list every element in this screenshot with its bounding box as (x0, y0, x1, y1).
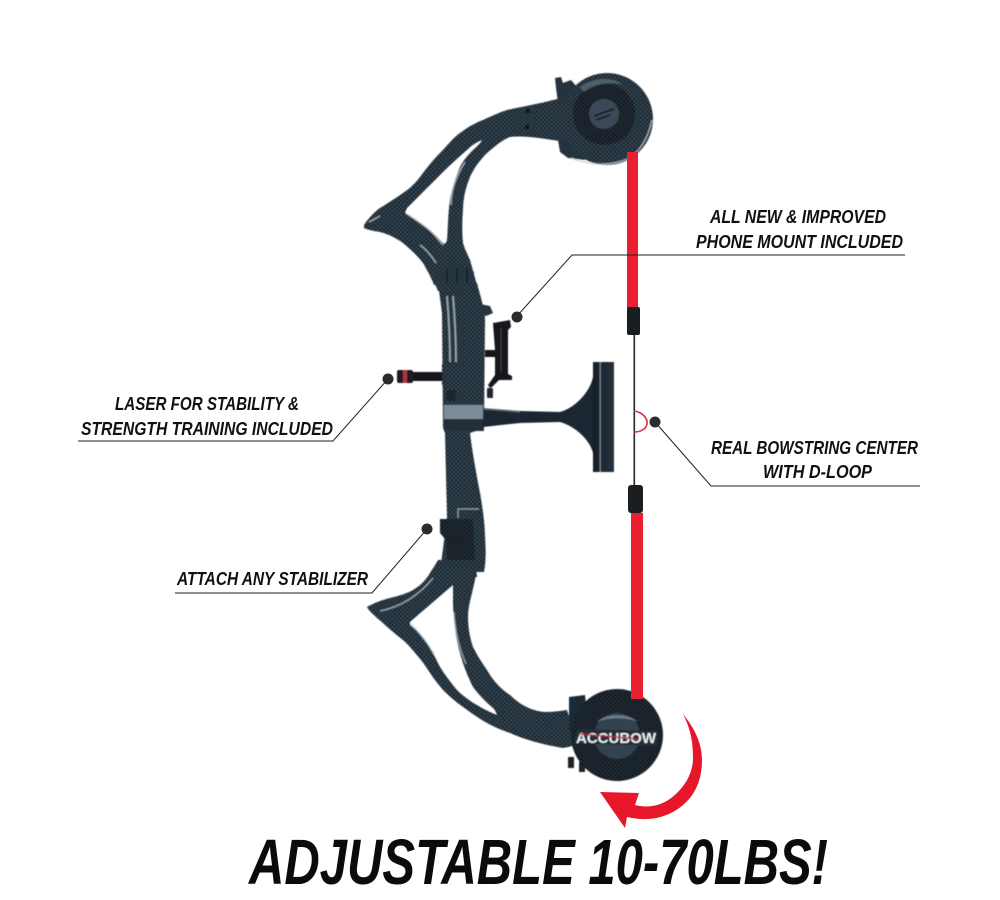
callout: laser (78, 374, 394, 441)
callout: d-loop: WITH D-LOOP (763, 461, 873, 482)
cam logo: ACCUBOW (576, 730, 657, 747)
laser (397, 362, 463, 388)
lower limb (367, 560, 578, 748)
callout: d-loop (650, 416, 920, 486)
callout: phone mount: PHONE MOUNT INCLUDED (696, 231, 903, 252)
callout: stabilizer: ATTACH ANY STABILIZER (176, 568, 369, 589)
stabilizer mount block (440, 519, 477, 577)
bow (364, 73, 663, 781)
riser (438, 283, 493, 577)
phone mount (485, 320, 512, 398)
headline: ADJUSTABLE 10-70LBS! (247, 826, 828, 898)
d-loop (634, 411, 647, 432)
limb hinge bracket (435, 268, 474, 294)
upper cam (555, 73, 653, 165)
callout: d-loop: REAL BOWSTRING CENTER (711, 437, 919, 458)
lower cam (568, 689, 663, 781)
bowstring (627, 152, 647, 699)
callout: phone mount: ALL NEW & IMPROVED (709, 206, 886, 227)
upper limb (364, 95, 590, 294)
riser light plate (444, 405, 483, 419)
adjustment arrow (600, 714, 702, 828)
callout: laser: STRENGTH TRAINING INCLUDED (81, 418, 333, 439)
grip handle (483, 362, 614, 472)
riser bracket (480, 304, 493, 316)
callout: stabilizer (175, 524, 432, 593)
callout: laser: LASER FOR STABILITY & (115, 393, 299, 414)
limb pins (525, 109, 530, 129)
callout: phone mount (512, 206, 905, 322)
